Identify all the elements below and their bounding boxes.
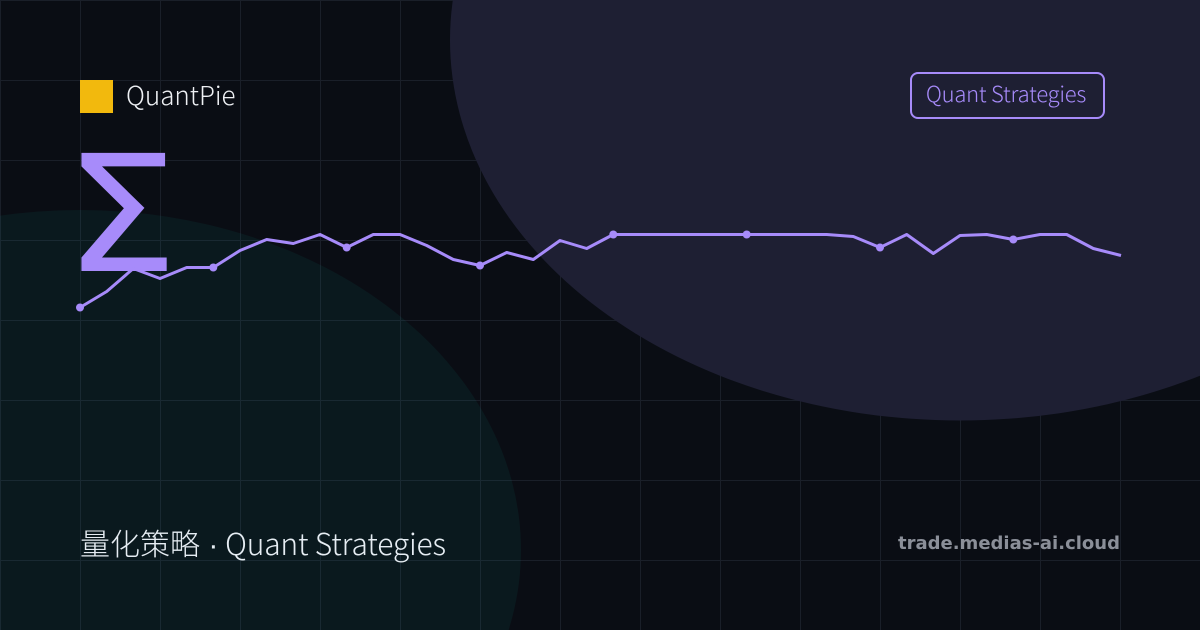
brand name: QuantPie: [126, 76, 236, 113]
domain footer: trade.medias-ai.cloud: [898, 533, 1120, 554]
subtitle: 量化策略 · Quant Strategies: [80, 520, 446, 564]
tag: Quant Strategies: Quant Strategies: [926, 77, 1086, 109]
logo square: [80, 80, 113, 113]
background ellipse: purple: [450, 0, 1200, 420]
background ellipse: green: [0, 210, 521, 630]
tag: Quant Strategies: [910, 72, 1105, 119]
icon: sigma symbol: Σ: [64, 122, 178, 310]
